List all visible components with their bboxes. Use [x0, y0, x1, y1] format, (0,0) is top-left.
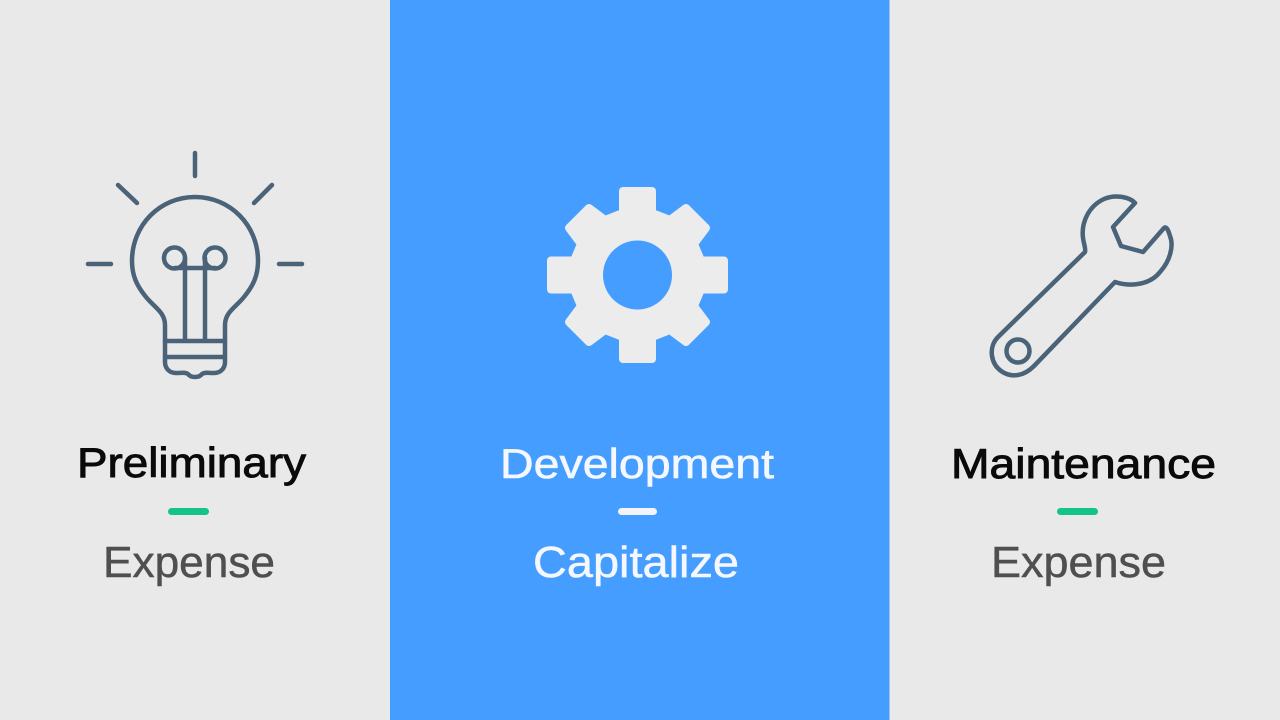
divider: white dash — [618, 508, 657, 515]
divider: green dash — [1057, 508, 1098, 515]
divider: green dash — [168, 508, 209, 515]
label: Expense: Expense — [103, 538, 275, 587]
icon: light bulb — [88, 153, 302, 377]
heading: Development: Development — [500, 440, 774, 487]
label: Capitalize: Capitalize — [533, 538, 739, 587]
heading: Preliminary: Preliminary — [77, 439, 306, 486]
panel: development — [390, 0, 890, 720]
panel: preliminary — [0, 0, 390, 720]
heading: Maintenance: Maintenance — [951, 440, 1216, 487]
icon: gear — [551, 191, 724, 359]
panel: maintenance — [890, 0, 1280, 720]
icon: wrench — [992, 196, 1172, 375]
label: Expense: Expense — [991, 538, 1166, 587]
